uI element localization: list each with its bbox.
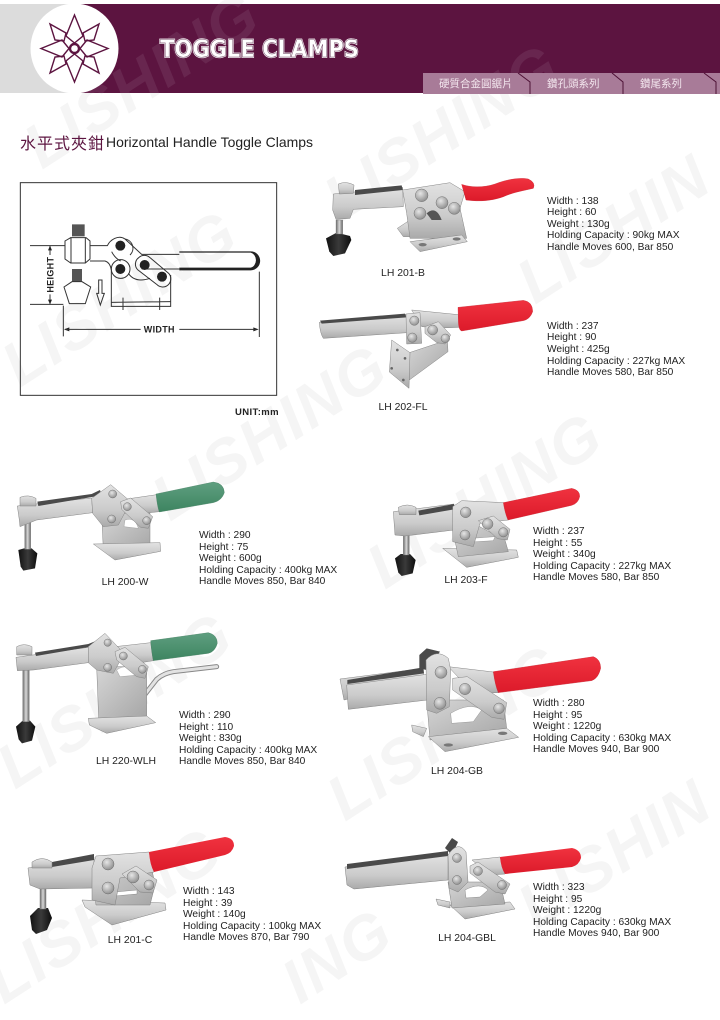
clamp photo: LH 203-F (393, 488, 580, 576)
label LH 203-F: LH 203-F (444, 575, 488, 586)
label LH 200-W: LH 200-W (102, 577, 149, 588)
specs LH 202-FL (547, 321, 685, 378)
clamp photo: LH 201-C (28, 837, 234, 934)
specs LH 202-FL: Height : 90 (547, 332, 597, 343)
specs LH 204-GB: Height : 95 (533, 710, 583, 721)
dimension diagram: WIDTH (144, 325, 175, 335)
specs LH 204-GBL: Weight : 1220g (533, 905, 602, 916)
specs LH 203-F: Holding Capacity : 227kg MAX (533, 561, 671, 572)
specs LH 202-FL: Handle Moves 580, Bar 850 (547, 367, 674, 378)
label LH 220-WLH: LH 220-WLH (96, 756, 156, 767)
specs LH 204-GB: Weight : 1220g (533, 721, 602, 732)
specs LH 204-GB (533, 698, 671, 755)
clamp photo: LH 204-GB (340, 648, 601, 752)
watermarks: LISHING (312, 31, 572, 234)
dimension diagram: HEIGHT (46, 257, 56, 293)
specs LH 204-GB: Width : 280 (533, 698, 585, 709)
watermarks: LISHIN (505, 142, 720, 317)
watermarks: LISHING (355, 399, 615, 602)
clamp photo: LH 204-GBL (345, 838, 581, 919)
specs LH 204-GBL: Width : 323 (533, 882, 585, 893)
specs LH 202-FL: Width : 237 (547, 321, 599, 332)
specs LH 200-W (199, 530, 337, 587)
watermarks: ING (270, 896, 405, 1017)
header banner: LISHING (312, 31, 572, 234)
specs LH 200-W: Width : 290 (199, 530, 251, 541)
header title: TOGGLE CLAMPS (160, 35, 359, 63)
specs LH 202-FL: Weight : 425g (547, 344, 610, 355)
specs LH 204-GB: Handle Moves 940, Bar 900 (533, 744, 660, 755)
label LH 204-GBL: LH 204-GBL (438, 933, 496, 944)
unit note: UNIT:mm (235, 407, 279, 418)
navigation tabs: 鑽尾系列 (640, 76, 682, 91)
label LH 202-FL: LH 202-FL (378, 402, 428, 413)
dimension diagram (20, 183, 277, 395)
specs LH 220-WLH (179, 710, 317, 767)
specs LH 220-WLH: Weight : 830g (179, 733, 242, 744)
clamp photo: LH 202-FL (319, 300, 533, 388)
section heading (20, 130, 313, 154)
header banner (0, 4, 720, 94)
watermarks: LISHING (140, 331, 400, 534)
specs LH 201-B: Weight : 130g (547, 219, 610, 230)
specs LH 220-WLH: Handle Moves 850, Bar 840 (179, 756, 306, 767)
specs LH 202-FL: Holding Capacity : 227kg MAX (547, 356, 685, 367)
section heading: Horizontal Handle Toggle Clamps (106, 134, 313, 150)
label LH 204-GB: LH 204-GB (431, 766, 483, 777)
specs LH 200-W: Height : 75 (199, 542, 249, 553)
clamp photo: LH 200-W (17, 482, 224, 571)
specs LH 203-F: Weight : 340g (533, 549, 596, 560)
logo: star in white oval (30, 4, 118, 94)
specs LH 201-B: Handle Moves 600, Bar 850 (547, 242, 674, 253)
clamp photo: LH 201-B (326, 178, 534, 256)
specs LH 203-F: Width : 237 (533, 526, 585, 537)
specs LH 203-F: Height : 55 (533, 538, 583, 549)
specs LH 201-C: Width : 143 (183, 886, 235, 897)
navigation tabs (423, 73, 720, 94)
specs LH 204-GBL: Handle Moves 940, Bar 900 (533, 928, 660, 939)
specs LH 200-W: Holding Capacity : 400kg MAX (199, 565, 337, 576)
specs LH 220-WLH: Height : 110 (179, 722, 234, 733)
section heading: 水平式夾鉗 (20, 130, 104, 154)
label LH 201-C: LH 201-C (108, 935, 153, 946)
specs LH 204-GBL: Holding Capacity : 630kg MAX (533, 917, 671, 928)
specs LH 201-C (183, 886, 321, 943)
specs LH 220-WLH: Holding Capacity : 400kg MAX (179, 745, 317, 756)
specs LH 220-WLH: Width : 290 (179, 710, 231, 721)
specs LH 200-W: Handle Moves 850, Bar 840 (199, 576, 326, 587)
specs LH 204-GBL: Height : 95 (533, 894, 583, 905)
specs LH 201-C: Weight : 140g (183, 909, 246, 920)
navigation tabs: 硬質合金圓鋸片 (439, 76, 512, 91)
label LH 201-B: LH 201-B (381, 268, 425, 279)
specs LH 200-W: Weight : 600g (199, 553, 262, 564)
watermarks: LISHING (315, 631, 575, 834)
specs LH 201-B: Height : 60 (547, 207, 597, 218)
specs LH 201-C: Height : 39 (183, 898, 233, 909)
watermarks: LISHIN (506, 767, 720, 942)
header title: TOGGLE CLAMPS (160, 35, 359, 63)
navigation tabs: 鑽孔頭系列 (547, 76, 600, 91)
specs LH 201-B: Width : 138 (547, 196, 599, 207)
clamp photo: LH 220-WLH (16, 633, 217, 743)
specs LH 204-GB: Holding Capacity : 630kg MAX (533, 733, 671, 744)
specs LH 201-C: Holding Capacity : 100kg MAX (183, 921, 321, 932)
specs LH 201-B (547, 196, 680, 253)
specs LH 204-GBL (533, 882, 671, 939)
specs LH 201-C: Handle Moves 870, Bar 790 (183, 932, 310, 943)
specs LH 201-B: Holding Capacity : 90kg MAX (547, 230, 680, 241)
specs LH 203-F: Handle Moves 580, Bar 850 (533, 572, 660, 583)
specs LH 203-F (533, 526, 671, 583)
